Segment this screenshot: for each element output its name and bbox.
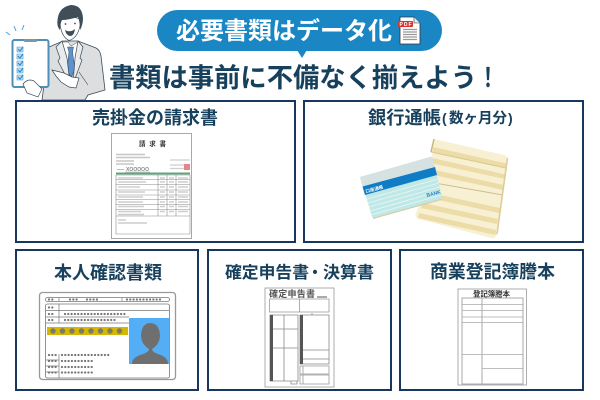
icon: businessman holding clipboard (6, 5, 105, 100)
panel: identification (16, 250, 198, 390)
pointing hand (52, 70, 79, 88)
heading: bank passbook: 数ヶ月分 (449, 109, 507, 127)
icon: ID card (40, 292, 176, 380)
panel: bank passbook (304, 101, 583, 242)
icon: PDF document (398, 17, 420, 44)
title: ！ (478, 63, 498, 93)
heading: tax return and statements (225, 262, 374, 282)
icon: PDF document: PDF (400, 22, 412, 28)
heading: corporate register: 商業登記簿謄本 (430, 262, 555, 282)
panel: tax return and statements (208, 250, 391, 390)
callout: data-ification speech bubble (157, 10, 442, 58)
icon: registry document (458, 288, 526, 385)
icon: tax return form: 確定申告書 (269, 288, 315, 299)
jacket (42, 41, 105, 100)
icon: bank card: BANK (426, 189, 442, 199)
heading: sales invoice: 売掛金の請求書 (92, 107, 218, 128)
heading: bank passbook (368, 108, 513, 128)
heading: bank passbook: 銀行通帳 (368, 108, 441, 128)
icon: bank card (360, 157, 442, 218)
icon: bank card: 口座通帳 (365, 183, 384, 195)
holding hand (23, 80, 42, 97)
icon: clipboard (6, 25, 48, 87)
panel: corporate register (400, 250, 583, 390)
icon: tax return form (265, 288, 334, 387)
icon: registry document: 登記簿謄本 (473, 288, 510, 298)
title: 書類は事前に不備なく揃えよう (109, 63, 477, 93)
heading: bank passbook: ( (442, 110, 447, 126)
heading: bank passbook: ) (508, 110, 513, 126)
heading: tax return and statements: 決算書 (323, 262, 374, 282)
panel: sales invoice (16, 101, 295, 242)
icon: invoice document: XOOOOO (126, 167, 149, 173)
heading: identification: 本人確認書類 (54, 262, 162, 283)
callout: data-ification speech bubble: 必要書類はデータ化 (176, 17, 392, 45)
heading: tax return and statements: ・ (307, 264, 323, 282)
icon: invoice document (112, 134, 192, 238)
heading: tax return and statements: 確定申告書 (225, 262, 309, 282)
icon: passbook (415, 139, 508, 238)
face (60, 17, 81, 40)
icon: invoice document: 請求書 (139, 139, 166, 148)
